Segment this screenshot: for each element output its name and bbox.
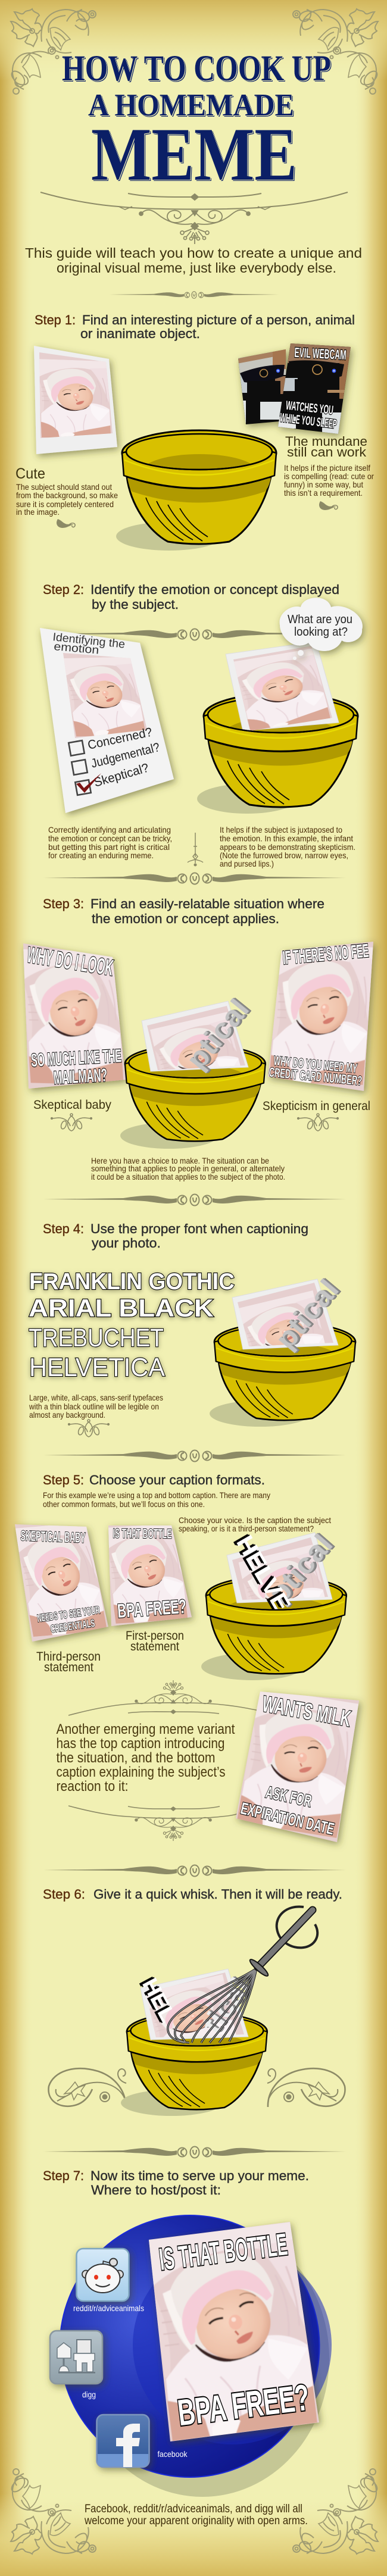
divider <box>43 873 346 884</box>
heading: step 4: Use the proper font when captioning <box>90 1221 308 1236</box>
captions: statement <box>130 1640 179 1653</box>
label: cute: Cute <box>15 465 45 482</box>
title ornament <box>40 192 348 244</box>
title: HOW TO COOK UP <box>62 49 331 89</box>
explanation: it could be a situation that applies to the subject of the photo. <box>91 1172 285 1181</box>
thought bubble: looking at? <box>294 626 348 639</box>
explanation left <box>48 825 172 860</box>
thought bubble <box>280 598 363 660</box>
meme: third person <box>14 1522 108 1642</box>
title: MEME <box>91 113 297 196</box>
heading: step 1 <box>35 312 355 341</box>
heading: step 6: Step 6: <box>43 1887 85 1902</box>
meme: wants milk: EXPIRATION DATE <box>239 1799 336 1839</box>
heading: step 5: Choose your caption formats. <box>89 1473 265 1487</box>
icon: facebook <box>96 2415 149 2467</box>
heading: step 4: your photo. <box>92 1236 161 1251</box>
meme: wants milk <box>236 1688 361 1842</box>
heading: step 4 <box>43 1221 308 1251</box>
heading: step 2: by the subject. <box>92 597 179 612</box>
heading: step 2: Step 2: <box>43 582 84 597</box>
divider <box>43 1865 346 1876</box>
font samples: TREBUCHET <box>29 1324 164 1352</box>
choose your voice <box>179 1515 331 1533</box>
side flourishes <box>49 2068 345 2107</box>
meme: skepticism in general <box>268 940 375 1091</box>
intro text: This guide will teach you how to create a unique and <box>25 245 362 261</box>
meme: is that bottle: BPA FREE? <box>176 2377 312 2434</box>
choose your voice: speaking, or is it a third-person statement? <box>179 1524 314 1533</box>
heading: step 3: Find an easily-relatable situation where <box>90 896 324 911</box>
heading: step 1: or inanimate object. <box>80 326 200 341</box>
flourishes <box>51 1114 338 1131</box>
label: cute: sure it is completely centered <box>16 499 114 509</box>
checklist card: emotion <box>54 640 99 657</box>
heading: step 1: Find an interesting picture of a person, animal <box>82 312 355 327</box>
bowl with photo and whisk: HEL <box>138 1974 181 2027</box>
flourish <box>319 501 338 510</box>
heading: step 7: Now its time to serve up your meme. <box>90 2168 309 2183</box>
photo in bowl with thought bubble <box>197 642 358 814</box>
captions: First-person <box>126 1629 184 1643</box>
explanation left: the emotion or concept can be tricky, <box>48 833 172 843</box>
label: the mundane still can work: The mundane <box>285 434 367 449</box>
panel: step 2 <box>40 582 363 868</box>
explanation right: the emotion. In this example, the infant <box>220 833 353 843</box>
captions: statement <box>44 1661 93 1674</box>
lower ornament <box>68 1806 238 1841</box>
explanation: with a thin black outline will be legible on <box>29 1402 159 1411</box>
label: facebook: facebook <box>157 2449 188 2459</box>
stem flourish <box>188 833 203 866</box>
heading: step 1: Step 1: <box>35 312 76 327</box>
meme: skeptical baby: WHY DO I LOOK <box>25 943 116 981</box>
thought bubble: What are you <box>288 613 352 626</box>
webcam images: WATCHES YOU <box>285 399 334 417</box>
meme: first person: IS THAT BOTTLE <box>113 1526 172 1541</box>
bowl with photo and whisk: tical <box>196 1972 256 2039</box>
polaroid photo <box>34 346 117 454</box>
explanation right: appears to be demonstrating skepticism. <box>220 842 355 852</box>
explanation: almost any background. <box>29 1410 105 1420</box>
divider <box>43 1450 346 1462</box>
divider <box>43 1194 346 1206</box>
meme: is that bottle <box>147 2221 319 2441</box>
flourish <box>68 1420 109 1437</box>
webcam images <box>237 342 354 436</box>
bowl with photo: ptical <box>180 993 255 1076</box>
explanation: other common formats, but we’ll focus on this one. <box>43 1499 205 1509</box>
label: the mundane still can work <box>284 434 374 498</box>
meme: third person: NEEDS TO SEE YOUR <box>36 1604 101 1624</box>
meme: third person: SKEPTICAL BABY <box>20 1528 86 1546</box>
blue plate <box>60 2215 332 2497</box>
explanation <box>43 1490 270 1509</box>
heading: step 7 <box>43 2168 309 2197</box>
heading: step 3: the emotion or concept applies. <box>92 911 279 926</box>
explanation: Large, white, all-caps, sans-serif typefaces <box>29 1393 163 1402</box>
checklist card: Identifying the <box>52 631 126 651</box>
explanation left: but getting this part right is critical <box>48 842 170 852</box>
explanation: For this example we’re using a top and bottom caption. There are many <box>43 1490 270 1500</box>
label: cute: from the background, so make <box>16 490 118 500</box>
title: A HOMEMADE <box>88 88 294 123</box>
text: another meme variant: Another emerging meme variant <box>56 1721 235 1737</box>
panel: step 6 <box>43 1887 345 2116</box>
panel: step 3 <box>21 896 375 1181</box>
panel: step 1 <box>15 312 374 551</box>
panel: step 4 <box>29 1221 355 1437</box>
explanation: Here you have a choice to make. The situation can be <box>91 1156 269 1165</box>
heading: step 3 <box>43 896 324 926</box>
font samples <box>29 1269 235 1382</box>
checklist card: Skeptical? <box>92 761 151 790</box>
meme: third person: CREDENTIALS <box>49 1617 96 1635</box>
label: cute: in the image. <box>16 507 60 517</box>
choose your voice: Choose your voice. Is the caption the subject <box>179 1515 331 1525</box>
heading: step 7: Step 7: <box>43 2168 84 2183</box>
captions <box>33 1098 370 1113</box>
heading: step 2 <box>43 582 339 612</box>
heading: step 5: Step 5: <box>43 1473 84 1487</box>
heading: step 4: Step 4: <box>43 1221 84 1236</box>
bowl <box>116 430 276 551</box>
explanation: something that applies to people in general, or alternately <box>91 1164 285 1173</box>
panel: step 7 <box>43 2168 332 2527</box>
checklist card <box>40 628 174 813</box>
font samples: ARIAL BLACK <box>29 1294 214 1322</box>
flourish <box>57 519 75 528</box>
text: another meme variant: has the top caption introducing <box>56 1736 225 1752</box>
label: the mundane still can work: this isn’t a requirement. <box>284 488 363 498</box>
title <box>62 49 331 196</box>
meme: skeptical baby: SO MUCH LIKE THE <box>30 1045 122 1071</box>
divider <box>43 2146 346 2158</box>
intro text <box>25 245 362 276</box>
checklist card: Concerned? <box>86 726 154 752</box>
label: cute: The subject should stand out <box>16 482 112 492</box>
meme: skeptical baby <box>21 943 126 1089</box>
icon: reddit <box>76 2249 129 2301</box>
explanation left: for creating an enduring meme. <box>48 851 154 860</box>
text: another meme variant: reaction to it: <box>56 1778 129 1795</box>
font samples: FRANKLIN GOTHIC <box>29 1269 235 1295</box>
explanation left: Correctly identifying and articulating <box>48 825 171 834</box>
divider <box>43 629 346 640</box>
bowl with photo <box>210 1274 355 1427</box>
bowl with photo <box>201 1528 347 1680</box>
captions: Third-person <box>36 1650 101 1664</box>
label: the mundane still can work: is compelling (read: cute or <box>284 471 374 481</box>
whisk <box>168 1906 317 2043</box>
text: another meme variant <box>56 1721 235 1795</box>
bowl with photo and whisk <box>121 1906 317 2116</box>
upper ornament <box>68 1680 262 1715</box>
checklist card: Judgemental? <box>90 740 161 771</box>
closing text: Facebook, reddit/r/adviceanimals, and digg will all <box>85 2503 302 2515</box>
heading: step 2: Identify the emotion or concept displayed <box>90 582 339 597</box>
label: the mundane still can work: It helps if the picture itself <box>284 463 370 473</box>
bowl with photo: ptical <box>270 1274 345 1355</box>
captions: Skeptical baby <box>33 1098 111 1112</box>
explanation right: (Note the furrowed brow, narrow eyes, <box>220 851 348 860</box>
divider <box>110 292 279 298</box>
text: another meme variant: caption explaining the subject’s <box>56 1764 225 1780</box>
meme: wants milk: ASK FOR <box>264 1783 313 1811</box>
label: the mundane still can work: still can work <box>287 445 367 459</box>
heading: step 7: Where to host/post it: <box>91 2183 221 2197</box>
closing text <box>84 2503 308 2527</box>
heading: step 3: Step 3: <box>43 896 84 911</box>
meme: first person <box>104 1523 192 1626</box>
meme: first person: BPA FREE? <box>117 1595 187 1622</box>
explanation right <box>220 825 355 868</box>
bowl with photo: HELVE <box>231 1531 295 1617</box>
label: reddit: reddit/r/adviceanimals <box>73 2303 144 2313</box>
font samples: HELVETICA <box>29 1353 166 1382</box>
text: another meme variant: the situation, and the bottom <box>56 1750 216 1766</box>
icon: digg <box>50 2331 102 2384</box>
heading: step 6: Give it a quick whisk. Then it will be ready. <box>93 1887 342 1902</box>
closing text: welcome your apparent originality with open arms. <box>84 2515 308 2527</box>
intro text: original visual meme, just like everybody else. <box>57 260 336 276</box>
explanation <box>91 1156 285 1181</box>
bowl with photo: ptical <box>263 1528 339 1609</box>
explanation <box>29 1393 163 1420</box>
label: the mundane still can work: funny) in some way, but <box>284 480 363 489</box>
meme: skeptical baby: MAILMAN? <box>53 1065 108 1088</box>
label: digg: digg <box>82 2390 96 2399</box>
label: cute <box>15 465 118 517</box>
captions: Skepticism in general <box>263 1099 370 1113</box>
captions <box>36 1629 184 1674</box>
panel: step 5 <box>14 1473 361 1842</box>
explanation right: and pursed lips.) <box>220 859 274 868</box>
bowl with photo <box>120 993 266 1149</box>
explanation right: It helps if the subject is juxtaposed to <box>220 825 342 834</box>
